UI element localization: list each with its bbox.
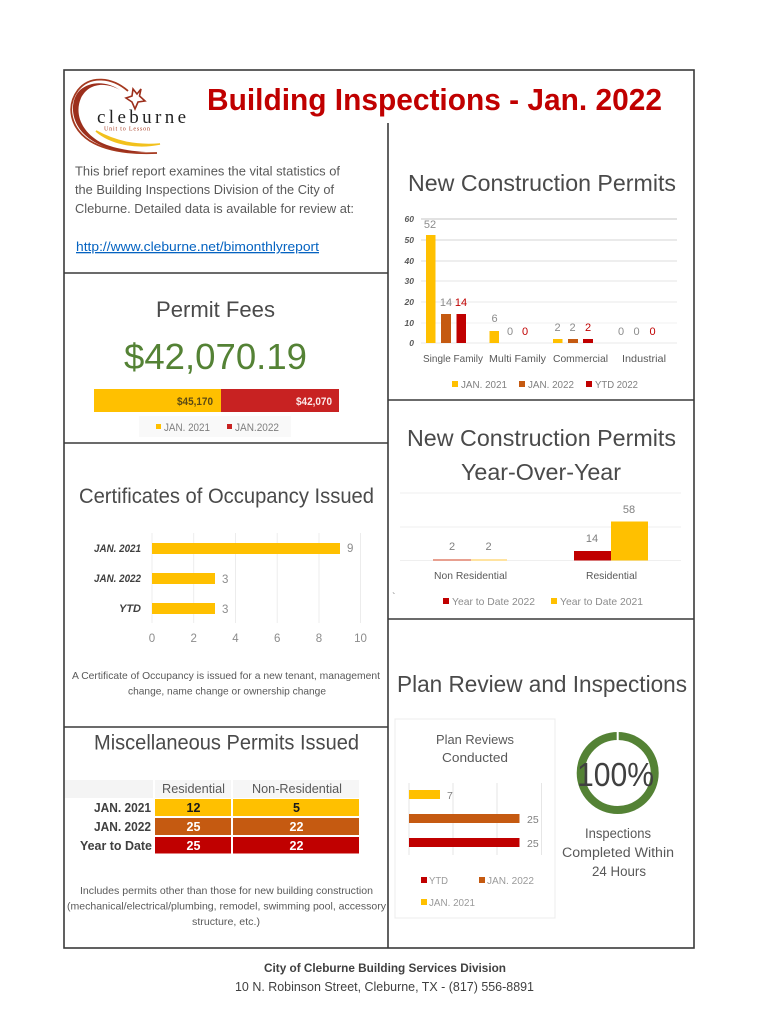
intro text block: This brief report examines the vital statistics of: [75, 164, 340, 178]
icon: Cleburne logo: [71, 80, 186, 153]
table: miscellaneous permits: 12: [187, 801, 200, 815]
heading: year-over-year: New Construction Permits: [407, 425, 676, 451]
bar chart: certificates: JAN. 2022: [94, 573, 141, 585]
bar chart: certificates: 0: [149, 633, 155, 645]
bar chart: certificates: JAN. 2021: [94, 543, 141, 555]
panel: year-over-year: [392, 425, 681, 608]
bar chart: year-over-year: Residential: [586, 570, 637, 582]
legend: year-over-year: Year to Date 2022: [452, 596, 535, 608]
legend: new construction: JAN. 2021: [461, 379, 507, 391]
table: miscellaneous permits: Non-Residential: [252, 782, 342, 796]
bar chart: new construction: 0: [649, 326, 656, 338]
table: miscellaneous permits: Year to Date: [80, 839, 152, 853]
icon: Cleburne logo: cleburne: [97, 107, 186, 128]
bar chart: new construction: 6: [491, 313, 498, 325]
heading: year-over-year: Year-Over-Year: [461, 459, 621, 485]
table: miscellaneous permits: 22: [290, 820, 303, 834]
table: miscellaneous permits: [65, 780, 359, 854]
intro text block: http://www.cleburne.net/bimonthlyreport: [76, 239, 319, 254]
bar chart: new construction: 50: [405, 235, 414, 245]
bar chart: new construction: 0: [618, 326, 624, 338]
chart card: plan reviews conducted: 25: [527, 838, 539, 850]
heading: miscellaneous permits: Miscellaneous Permits Issued: [94, 732, 359, 754]
bar chart: new construction: 20: [404, 297, 414, 307]
heading: plan review: Plan Review and Inspections: [397, 671, 687, 697]
bar chart: new construction: [404, 214, 677, 365]
bar chart: new construction: 40: [404, 256, 414, 266]
bar chart: certificates: 9: [347, 543, 353, 555]
intro text block: the Building Inspections Division of the City of: [75, 182, 334, 197]
table: miscellaneous permits: 22: [290, 839, 303, 853]
bar chart: certificates: 2: [190, 633, 197, 645]
legend: year-over-year: [392, 591, 643, 608]
bar chart: new construction: Multi Family: [489, 353, 547, 365]
panel: certificates of occupancy: [72, 485, 380, 698]
legend: year-over-year: Year to Date 2021: [560, 596, 643, 608]
bar chart: year-over-year: Non Residential: [434, 570, 507, 582]
heading: certificates: Certificates of Occupancy Issued: [79, 485, 374, 508]
miscellaneous permits note: [67, 885, 387, 928]
legend: fees: [139, 416, 291, 437]
heading: new construction permits: New Construction Permits: [408, 170, 676, 196]
bar chart: new construction: 60: [405, 214, 414, 224]
legend: fees: JAN.2022: [235, 422, 279, 434]
miscellaneous permits note: structure, etc.): [192, 916, 260, 928]
bar chart: certificates: [94, 533, 367, 645]
stacked bar: fees comparison: [94, 389, 339, 412]
donut chart: 100 percent: 100%: [577, 756, 654, 793]
chart card: plan reviews conducted: YTD: [429, 875, 448, 887]
stacked bar: fees comparison: $45,170: [177, 396, 213, 408]
bar chart: certificates: 6: [274, 633, 280, 645]
chart card: plan reviews conducted: JAN. 2021: [429, 897, 475, 909]
intro text block: Cleburne. Detailed data is available for review at:: [75, 201, 354, 216]
table: miscellaneous permits: Residential: [162, 782, 225, 796]
bar chart: new construction: 0: [507, 326, 513, 338]
bar chart: certificates: 10: [354, 633, 367, 645]
chart card: plan reviews conducted: Conducted: [442, 750, 508, 765]
icon: Cleburne logo: Unit to Lesson: [104, 126, 150, 132]
title: Building Inspections - Jan. 2022: [207, 82, 662, 117]
chart card: plan reviews conducted: Plan Reviews: [436, 732, 514, 747]
table: miscellaneous permits: 5: [293, 801, 300, 815]
bar chart: new construction: 14: [440, 297, 452, 309]
donut chart: 100 percent: [577, 730, 655, 810]
bar chart: new construction: Industrial: [622, 353, 666, 365]
bar chart: year-over-year: 14: [586, 533, 598, 545]
chart card: plan reviews conducted: [395, 719, 555, 918]
bar chart: new construction: 30: [405, 276, 414, 286]
heading: permit fees: Permit Fees: [156, 297, 275, 322]
legend: fees: JAN. 2021: [164, 422, 210, 434]
panel: permit fees: [94, 297, 339, 437]
stacked bar: fees comparison: $42,070: [296, 396, 332, 408]
chart card: plan reviews conducted: 7: [447, 790, 453, 802]
legend: new construction: [452, 379, 638, 391]
bar chart: new construction: 2: [554, 322, 561, 334]
bar chart: certificates: 8: [316, 633, 322, 645]
panel: miscellaneous permits: [65, 732, 387, 928]
footer: City of Cleburne Building Services Division: [264, 961, 506, 975]
permit fees total: $42,070.19: [124, 336, 307, 377]
donut caption: [562, 826, 674, 879]
heading: year-over-year: [407, 425, 676, 485]
table: miscellaneous permits: 25: [187, 820, 200, 834]
bar chart: certificates: 4: [232, 633, 239, 645]
report frame: [64, 70, 694, 948]
bar chart: new construction: 14: [455, 297, 467, 309]
bar chart: new construction: Single Family: [423, 353, 484, 365]
donut caption: Completed Within: [562, 845, 674, 860]
bar chart: new construction: 0: [522, 326, 528, 338]
bar chart: year-over-year: 58: [623, 504, 635, 516]
table: miscellaneous permits: 25: [187, 839, 200, 853]
miscellaneous permits note: Includes permits other than those for new building construction: [80, 885, 373, 897]
chart card: plan reviews conducted: JAN. 2022: [487, 875, 534, 887]
table: miscellaneous permits: JAN. 2022: [94, 820, 151, 834]
footer: [235, 961, 534, 994]
certificates note: change, name change or ownership change: [128, 686, 326, 698]
bar chart: new construction: 52: [424, 219, 436, 231]
legend: new construction: JAN. 2022: [528, 379, 574, 391]
legend: year-over-year: `: [392, 591, 396, 603]
bar chart: certificates: 3: [222, 604, 228, 616]
donut caption: Inspections: [585, 826, 651, 841]
panel: new construction permits: [404, 170, 677, 391]
bar chart: new construction: 0: [409, 338, 414, 348]
intro text block: [75, 164, 354, 254]
panel: plan review and inspections: [395, 671, 687, 918]
bar chart: year-over-year: 2: [485, 541, 492, 553]
legend: new construction: YTD 2022: [595, 379, 638, 391]
footer: 10 N. Robinson Street, Cleburne, TX - (817) 556-8891: [235, 980, 534, 994]
donut caption: 24 Hours: [592, 864, 646, 879]
table: miscellaneous permits: JAN. 2021: [94, 801, 151, 815]
chart card: plan reviews conducted: 25: [527, 814, 539, 826]
bar chart: new construction: 2: [569, 322, 576, 334]
miscellaneous permits note: (mechanical/electrical/plumbing, remodel, swimming pool, accessory: [67, 900, 387, 912]
bar chart: new construction: 2: [585, 322, 591, 334]
bar chart: new construction: 10: [405, 318, 414, 328]
bar chart: new construction: Commercial: [553, 353, 608, 365]
bar chart: year-over-year: [400, 493, 681, 582]
bar chart: new construction: 0: [633, 326, 640, 338]
certificates note: [72, 670, 380, 698]
bar chart: year-over-year: 2: [449, 541, 455, 553]
certificates note: A Certificate of Occupancy is issued for a new tenant, management: [72, 670, 380, 682]
bar chart: certificates: YTD: [119, 603, 141, 615]
bar chart: certificates: 3: [222, 574, 228, 586]
